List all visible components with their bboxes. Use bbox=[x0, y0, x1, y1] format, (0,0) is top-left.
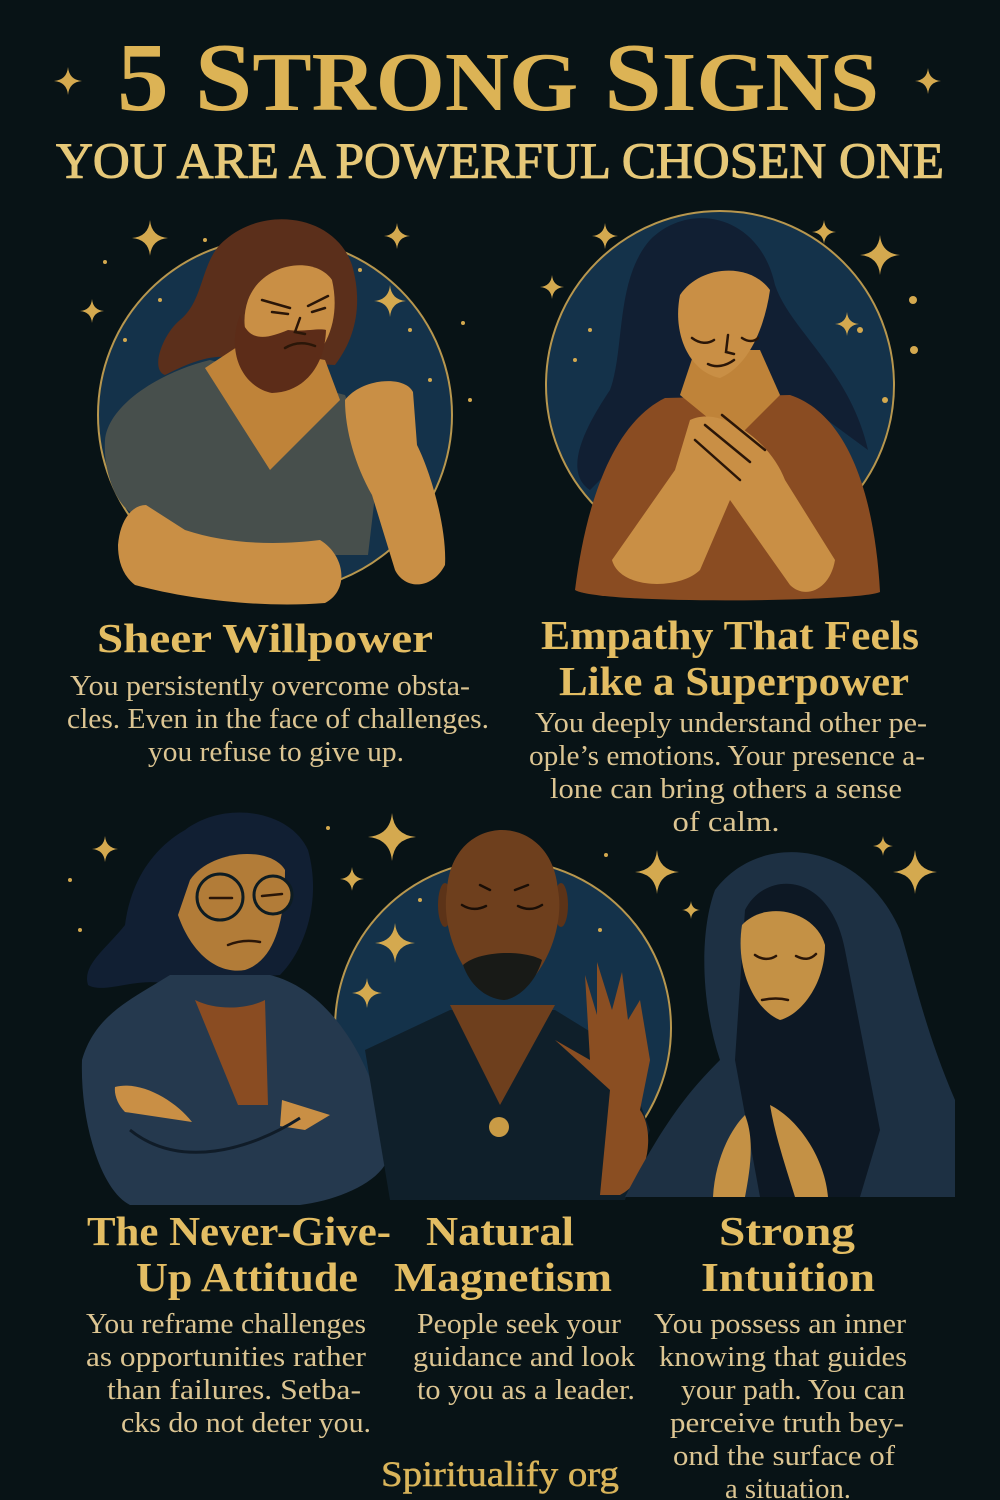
heading: Up Attitude bbox=[136, 1254, 358, 1300]
heading: Intuition bbox=[701, 1254, 875, 1300]
figure: man with glasses bbox=[82, 813, 390, 1205]
title: 5 STRONG SIGNS bbox=[117, 24, 879, 132]
heading bbox=[701, 1208, 875, 1300]
body text: cks do not deter you. bbox=[121, 1408, 371, 1439]
body text bbox=[529, 708, 927, 838]
neck and chest bbox=[205, 345, 340, 470]
body text: You reframe challenges bbox=[86, 1309, 366, 1340]
hair bbox=[158, 219, 357, 375]
body text: than failures. Setba- bbox=[107, 1375, 361, 1406]
body text: ople’s emotions. Your presence a- bbox=[529, 741, 925, 772]
heading bbox=[541, 612, 919, 704]
body text: You deeply understand other pe- bbox=[535, 708, 927, 739]
body text: of calm. bbox=[672, 807, 780, 838]
body text: as opportunities rather bbox=[86, 1342, 367, 1373]
heading: The Never-Give- bbox=[87, 1208, 391, 1254]
body text: to you as a leader. bbox=[417, 1375, 635, 1406]
face bbox=[244, 265, 335, 370]
heading bbox=[87, 1208, 391, 1300]
body text: You persistently overcome obsta- bbox=[70, 671, 470, 702]
beard bbox=[235, 315, 326, 393]
footer brand: Spiritualify org bbox=[381, 1454, 619, 1494]
heading: Natural bbox=[426, 1208, 574, 1254]
heading bbox=[394, 1208, 612, 1300]
hands and arms bbox=[612, 416, 835, 592]
heading: Sheer Willpower bbox=[97, 615, 433, 661]
body text bbox=[86, 1309, 371, 1439]
body text: People seek your bbox=[417, 1309, 622, 1340]
subtitle: YOU ARE A POWERFUL CHOSEN ONE bbox=[56, 134, 944, 190]
title sparkles bbox=[54, 67, 941, 95]
heading: Like a Superpower bbox=[559, 658, 909, 704]
panel: natural magnetism bbox=[394, 1208, 636, 1406]
body text: ond the surface of bbox=[673, 1441, 896, 1472]
hair bbox=[577, 218, 868, 490]
panel: empathy bbox=[529, 211, 927, 838]
panel: sheer willpower bbox=[67, 219, 489, 768]
torso bbox=[105, 360, 378, 555]
illustration: angry bearded man bbox=[80, 219, 472, 604]
body text bbox=[654, 1309, 907, 1500]
forearm and fist bbox=[118, 505, 341, 604]
panel: strong intuition bbox=[654, 1208, 907, 1500]
figure: hooded woman bbox=[625, 852, 955, 1197]
raised fist bbox=[345, 381, 445, 584]
figure: bald man bbox=[365, 830, 650, 1200]
illustration: three figures bbox=[68, 813, 955, 1205]
face details bbox=[692, 335, 758, 366]
face bbox=[678, 271, 770, 378]
neck bbox=[680, 350, 780, 440]
body text: you refuse to give up. bbox=[148, 737, 404, 768]
illustration: woman with hands on heart bbox=[540, 211, 918, 600]
body text: cles. Even in the face of challenges. bbox=[67, 704, 489, 735]
heading: Strong bbox=[719, 1208, 856, 1254]
heading: Magnetism bbox=[394, 1254, 612, 1300]
body text: guidance and look bbox=[413, 1342, 636, 1373]
body text: your path. You can bbox=[681, 1375, 905, 1406]
body text: lone can bring others a sense bbox=[550, 774, 902, 805]
panel: never-give-up bbox=[86, 1208, 391, 1439]
body bbox=[575, 395, 880, 600]
body text: knowing that guides bbox=[659, 1342, 907, 1373]
body text: You possess an inner bbox=[654, 1309, 907, 1340]
body text bbox=[67, 671, 489, 768]
body text: perceive truth bey- bbox=[670, 1408, 904, 1439]
face details bbox=[262, 296, 328, 348]
heading: Empathy That Feels bbox=[541, 612, 919, 658]
body text bbox=[413, 1309, 636, 1406]
